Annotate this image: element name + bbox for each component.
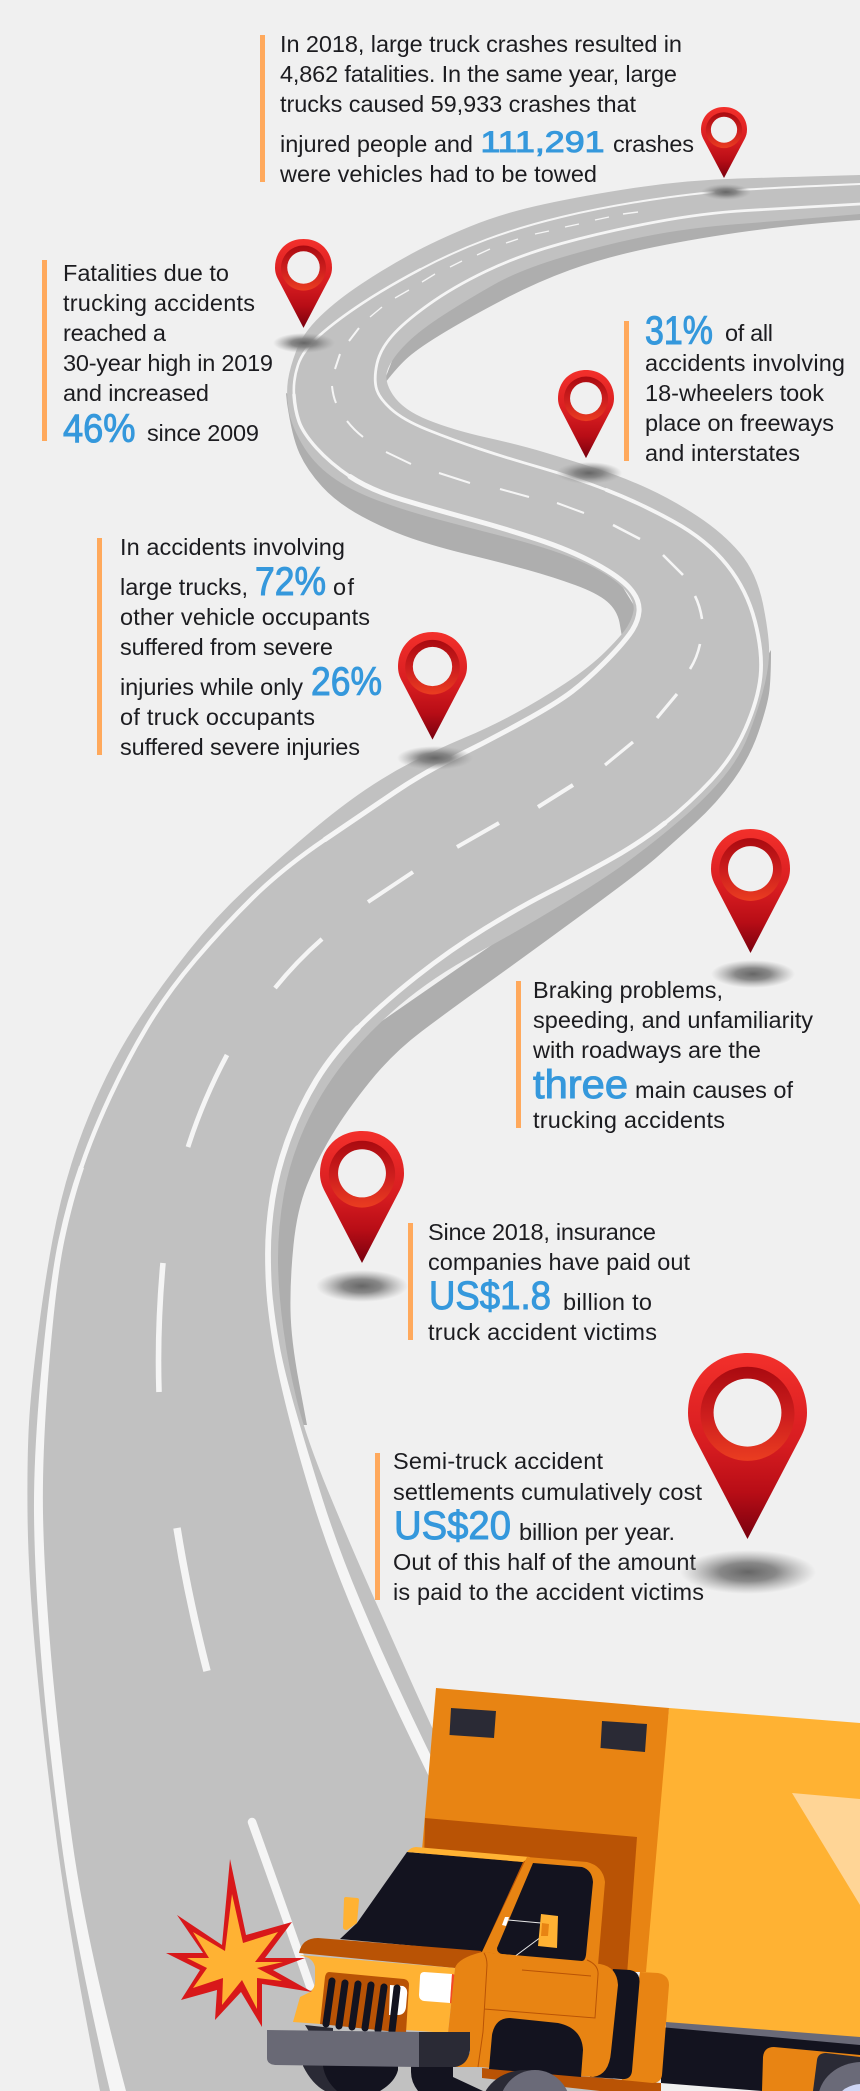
front wheel back	[303, 2025, 345, 2091]
text block: 30-year high: since 2009	[147, 420, 259, 446]
text block: freeways and interstates: and interstates	[645, 440, 800, 466]
road centre dashes	[158, 212, 702, 1986]
chassis	[660, 2027, 860, 2091]
text block: three main causes: speeding, and unfamiliarity	[533, 1007, 813, 1033]
text block: 30-year high: Fatalities due to	[63, 260, 229, 286]
text block: severe injuries	[97, 534, 382, 760]
front fender	[448, 1952, 618, 2077]
headlight	[419, 1972, 461, 2004]
text block: settlements: Semi-truck accident	[393, 1448, 603, 1474]
text block: 2018 fatalities: 111,291	[480, 126, 604, 159]
text block: 2018 fatalities: 4,862 fatalities. In the same year, large	[280, 61, 677, 87]
cargo box side	[640, 1708, 860, 2040]
truck	[267, 1688, 860, 2091]
text block: severe injuries: of	[333, 574, 354, 600]
text block: severe injuries: suffered severe injuries	[120, 734, 360, 760]
cargo front shade	[422, 1818, 637, 1975]
text block: severe injuries: of truck occupants	[120, 704, 315, 730]
text block: freeways and interstates	[624, 309, 845, 466]
door mirror	[488, 1914, 558, 1969]
text block: three main causes: three	[533, 1063, 628, 1107]
text block: insurance payouts: US$1.8	[429, 1274, 551, 1318]
text block: settlements: settlements cumulatively cost	[393, 1479, 702, 1505]
map pin 7 with shadow	[680, 1353, 816, 1594]
text block: 30-year high: trucking accidents	[63, 290, 255, 316]
text block: 30-year high: 46%	[63, 407, 136, 451]
text block: insurance payouts: billion to	[563, 1289, 652, 1315]
road edge line: inner	[267, 204, 860, 1850]
text block: freeways and interstates: accidents involving	[645, 350, 845, 376]
cab lower strip	[482, 2068, 661, 2091]
text block: insurance payouts: truck accident victims	[428, 1319, 657, 1345]
text block: settlements: billion per year.	[519, 1519, 675, 1545]
text block: three main causes: main causes of	[635, 1077, 793, 1103]
map pin 1 with shadow	[701, 107, 751, 200]
fender lines	[478, 1953, 598, 2067]
cargo box front	[422, 1688, 669, 1972]
rear fender panel	[622, 1972, 669, 2083]
road side wall: middle curve	[286, 393, 638, 637]
text block: severe injuries: suffered from severe	[120, 634, 333, 660]
text block: freeways and interstates: 31%	[645, 309, 713, 353]
text block: insurance payouts	[408, 1219, 690, 1345]
text block: 2018 fatalities: trucks caused 59,933 crashes that	[280, 91, 636, 117]
bumper	[267, 2030, 470, 2067]
text block: 30-year high	[42, 260, 273, 451]
text block: severe injuries: 26%	[311, 660, 382, 704]
cargo underside strip	[666, 2022, 860, 2047]
text block: severe injuries: injuries while only	[120, 674, 303, 700]
text block: 2018 fatalities: crashes	[613, 131, 694, 157]
text block: freeways and interstates: place on freeways	[645, 410, 834, 436]
dark gap behind fender	[590, 1969, 640, 2079]
cab roof vents	[450, 1708, 647, 1752]
text block: settlements: Out of this half of the amount	[393, 1549, 696, 1575]
grille	[320, 1972, 409, 2033]
rear wheel arch	[762, 2047, 860, 2091]
text block: settlements	[375, 1448, 704, 1605]
icon: crash explosion	[166, 1859, 312, 2027]
left wing mirror	[343, 1897, 359, 1930]
road side wall: upper curve	[382, 205, 860, 387]
map pin 3 with shadow	[556, 370, 622, 484]
text block: 2018 fatalities: In 2018, large truck crashes resulted in	[280, 31, 682, 57]
text block: settlements: US$20	[394, 1504, 511, 1548]
text block: severe injuries: 72%	[255, 560, 326, 604]
map pin 2 with shadow	[273, 239, 335, 353]
text block: freeways and interstates: of all	[725, 320, 773, 346]
text block: severe injuries: In accidents involving	[120, 534, 345, 560]
door window	[497, 1863, 593, 1961]
text block: settlements: is paid to the accident victims	[393, 1579, 704, 1605]
text block: insurance payouts: Since 2018, insurance	[428, 1219, 656, 1245]
text block: 30-year high: 30-year high in 2019	[63, 350, 273, 376]
second wheel	[481, 2070, 571, 2091]
text block: 2018 fatalities: injured people and	[280, 131, 473, 157]
text block: freeways and interstates: 18-wheelers took	[645, 380, 824, 406]
windshield	[340, 1852, 523, 1952]
text block: three main causes	[516, 977, 813, 1133]
map pin 4 with shadow	[397, 632, 473, 770]
map pin 5 with shadow	[711, 829, 795, 988]
door frame	[482, 1857, 605, 1965]
cab front	[293, 1955, 455, 2033]
text block: three main causes: with roadways are the	[532, 1037, 761, 1063]
text block: severe injuries: large trucks,	[120, 574, 248, 600]
text block: 30-year high: reached a	[63, 320, 167, 346]
cargo highlight triangle	[792, 1793, 860, 1905]
text block: three main causes: Braking problems,	[533, 977, 723, 1003]
text block: severe injuries: other vehicle occupants	[120, 604, 370, 630]
text block: 30-year high: and increased	[63, 380, 209, 406]
text block: insurance payouts: companies have paid out	[428, 1249, 690, 1275]
axle	[411, 2066, 483, 2091]
front wheel arch	[489, 2018, 583, 2077]
road side wall: lower curve	[268, 650, 771, 1425]
text block: 2018 fatalities	[260, 31, 694, 187]
roof edge	[407, 1847, 530, 1862]
map pin 6 with shadow	[316, 1131, 408, 1302]
hood	[299, 1938, 482, 1968]
text block: 2018 fatalities: were vehicles had to be towed	[279, 161, 597, 187]
text block: three main causes: trucking accidents	[533, 1107, 725, 1133]
